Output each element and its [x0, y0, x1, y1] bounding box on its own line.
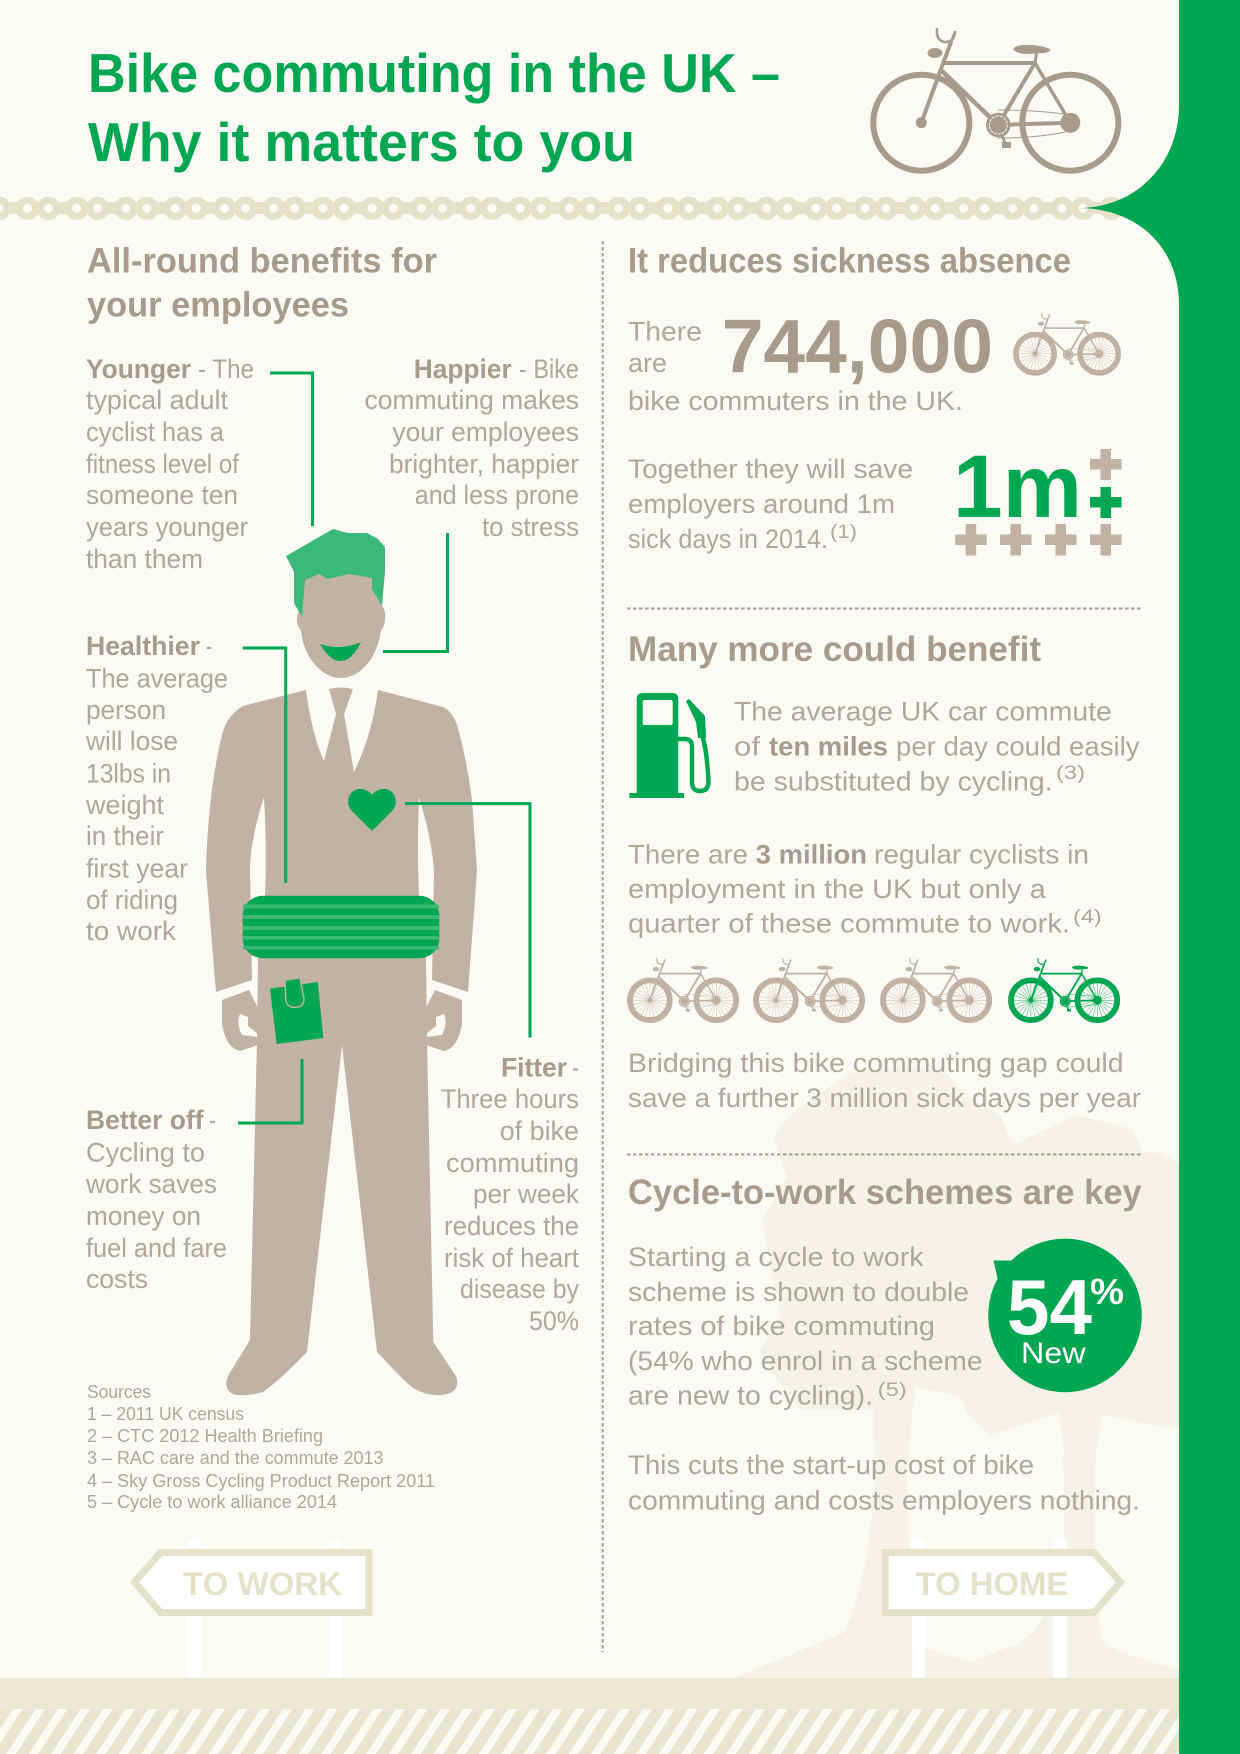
text: younger: typical adult [86, 385, 228, 415]
text: sick days saved [628, 454, 913, 554]
heading: all-round benefits: your employees [87, 286, 349, 324]
text: younger: - The [198, 354, 254, 384]
sources list: 5 – Cycle to work alliance 2014 [87, 1492, 337, 1512]
panel: sickness absence [628, 242, 1122, 556]
text: healthier: in their [86, 821, 164, 851]
text: happier: - Bike [519, 354, 579, 384]
text: regular cyclists: employment in the UK but only a [628, 874, 1047, 904]
ground stripes [0, 1709, 1180, 1754]
text: better off: costs [86, 1264, 148, 1294]
text: happier: to stress [482, 512, 579, 542]
title [88, 42, 780, 173]
icon: health crosses [955, 449, 1122, 556]
text: healthier: Healthier [86, 631, 200, 661]
text: car commute [734, 697, 1140, 797]
text: car commute: of [734, 732, 761, 762]
text: start-up cost: commuting and costs employers nothing. [628, 1486, 1140, 1516]
text: fitter: Three hours [441, 1084, 579, 1114]
ground band [0, 1678, 1180, 1709]
heading: all-round benefits: All-round benefits for [87, 242, 437, 280]
text: scheme: are new to cycling). [628, 1381, 873, 1411]
stat: 1m: 1m [953, 436, 1082, 536]
panel: many more could benefit [628, 630, 1141, 1113]
sources list: 1 – 2011 UK census [87, 1404, 244, 1424]
sign: to work: TO WORK [183, 1566, 342, 1602]
text: fitter: Fitter [501, 1053, 567, 1083]
sign: to work [134, 1539, 369, 1678]
heading: It reduces sickness absence [628, 242, 1071, 280]
text: sick days saved: (1) [830, 522, 857, 543]
bicycle row: one in four [630, 958, 1117, 1020]
heading: all-round benefits [87, 242, 437, 324]
heading: Many more could benefit [628, 630, 1041, 669]
sources list: 2 – CTC 2012 Health Briefing [87, 1426, 323, 1446]
text: scheme: scheme is shown to double [628, 1277, 969, 1307]
callout: 54% new: % [1090, 1271, 1124, 1312]
stat: 744,000 commuters: bike commuters in the UK. [628, 386, 963, 416]
text: younger: fitness level of [86, 449, 239, 479]
callout: 54% new: 54 [1007, 1263, 1092, 1351]
icon: spoked bicycle [1016, 313, 1118, 373]
text: car commute: ten miles [769, 732, 888, 762]
text: regular cyclists: quarter of these commute to work. [628, 909, 1070, 939]
text: car commute: per day could easily [896, 732, 1140, 762]
text: fitter: per week [473, 1179, 579, 1209]
text: happier: commuting makes [364, 385, 579, 415]
text: regular cyclists: 3 million [756, 839, 867, 869]
text: healthier: to work [86, 916, 177, 946]
text: healthier: weight [85, 790, 164, 820]
callout: 54% new [988, 1239, 1142, 1392]
text: fitter: commuting [446, 1148, 579, 1178]
text: fitter: of bike [500, 1116, 579, 1146]
text: scheme: (5) [878, 1380, 907, 1401]
title: Why it matters to you [88, 111, 635, 173]
text: sick days saved: sick days in 2014. [628, 524, 828, 554]
sources list: Sources [87, 1382, 151, 1402]
text: scheme: Starting a cycle to work [628, 1242, 924, 1272]
heart [348, 789, 396, 831]
text: fitter: 50% [529, 1306, 579, 1336]
text: better off: work saves [85, 1169, 217, 1199]
text: start-up cost [628, 1450, 1140, 1516]
wallet [270, 978, 323, 1044]
text: younger: years younger [86, 512, 248, 542]
text: fitter: reduces the [444, 1211, 579, 1241]
hands [222, 990, 462, 1051]
waistband [243, 896, 439, 958]
dividers [603, 241, 1141, 1652]
text: fitter [441, 1053, 579, 1336]
text: commuting gap: save a further 3 million sick days per year [628, 1083, 1141, 1113]
text: regular cyclists: (4) [1073, 907, 1102, 928]
text: car commute: be substituted by cycling. [734, 767, 1053, 797]
text: happier: brighter, happier [389, 449, 579, 479]
text: sick days saved: Together they will save [628, 454, 913, 484]
sign: to home: TO HOME [916, 1566, 1068, 1602]
text: healthier: first year [86, 854, 188, 884]
decorative bicycle chain [0, 196, 1126, 221]
text: fitter: - [572, 1053, 579, 1083]
text: commuting gap: Bridging this bike commuting gap could [628, 1048, 1124, 1078]
text: younger: than them [86, 544, 203, 574]
text: start-up cost: This cuts the start-up cost of bike [628, 1450, 1034, 1480]
stat: 744,000 commuters [628, 305, 993, 416]
text: healthier: 13lbs in [86, 759, 171, 789]
figure: businessman [206, 529, 477, 1395]
sources list: 3 – RAC care and the commute 2013 [87, 1448, 384, 1468]
text: happier: and less prone [415, 480, 579, 510]
body and suit [206, 688, 477, 1395]
text: healthier: The average [86, 664, 228, 694]
background: ghost cyclist silhouette [733, 1068, 1190, 1678]
text: healthier [85, 631, 228, 946]
callout: 54% new: New [1021, 1337, 1086, 1370]
smile [320, 642, 361, 661]
text: commuting gap [628, 1048, 1141, 1113]
text: better off: Better off [86, 1105, 204, 1135]
text: better off: fuel and fare [86, 1233, 227, 1263]
stat: 744,000 commuters: are [628, 348, 667, 378]
icon: large bicycle [873, 29, 1118, 171]
text: scheme: rates of bike commuting [628, 1311, 935, 1341]
text: sick days saved: employers around 1m [628, 489, 895, 519]
text: healthier: - [206, 631, 212, 661]
text: younger: cyclist has a [86, 417, 225, 447]
stat: 744,000 commuters: There [628, 317, 702, 347]
text: regular cyclists: There are [628, 839, 748, 869]
text: happier: Happier [414, 354, 512, 384]
text: scheme [628, 1242, 982, 1411]
text: happier: your employees [392, 417, 579, 447]
text: happier [364, 354, 579, 542]
text: regular cyclists: regular cyclists in [874, 839, 1089, 869]
text: fitter: disease by [460, 1274, 579, 1304]
text: healthier: person [86, 695, 166, 725]
icon: fuel pump [629, 693, 708, 798]
sources list [87, 1382, 435, 1512]
text: younger: someone ten [86, 480, 238, 510]
title: Bike commuting in the UK – [88, 42, 780, 104]
text: car commute: (3) [1056, 763, 1085, 784]
text: better off: money on [86, 1201, 201, 1231]
heading: Cycle-to-work schemes are key [628, 1173, 1142, 1212]
panel: cycle-to-work schemes [628, 1173, 1142, 1516]
text: better off: Cycling to [86, 1138, 205, 1168]
text: younger: Younger [86, 354, 191, 384]
text: better off: - [209, 1105, 216, 1135]
text: fitter: risk of heart [444, 1243, 579, 1273]
green side bar with curved tip [1078, 0, 1240, 1754]
text: healthier: will lose [85, 726, 178, 756]
sources list: 4 – Sky Gross Cycling Product Report 2011 [87, 1471, 435, 1491]
sign: to home [885, 1539, 1120, 1678]
connector lines [238, 373, 530, 1123]
stat: 744,000 commuters: 744,000 [722, 305, 993, 390]
text: car commute: The average UK car commute [734, 697, 1112, 727]
head [297, 574, 385, 678]
text: younger [86, 354, 254, 574]
text: regular cyclists [628, 839, 1102, 939]
hair [286, 529, 385, 617]
text: healthier: of riding [86, 885, 178, 915]
text: scheme: (54% who enrol in a scheme [628, 1346, 982, 1376]
text: better off [85, 1105, 227, 1294]
